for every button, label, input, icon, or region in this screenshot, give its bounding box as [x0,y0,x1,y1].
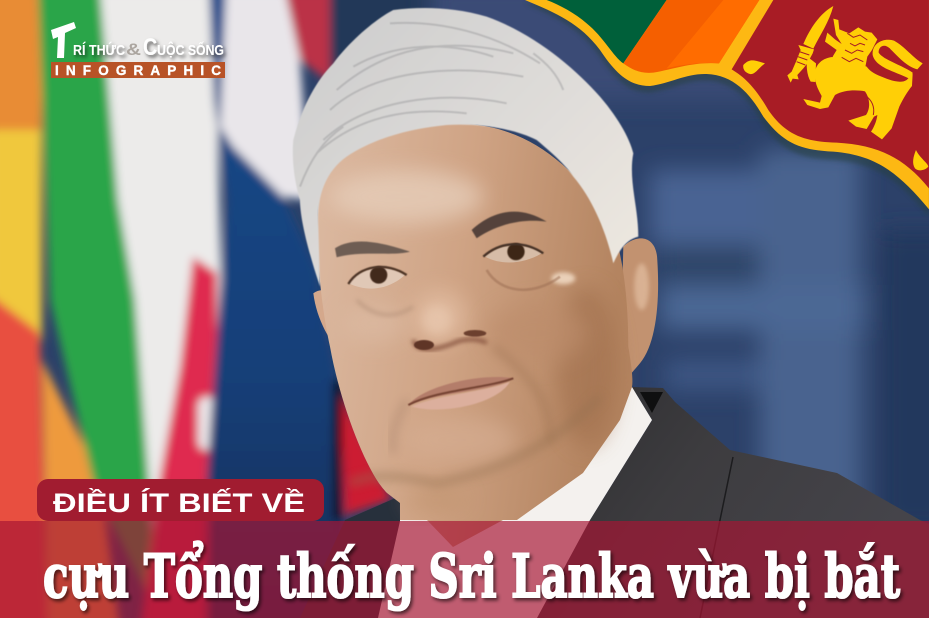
right eyebrow [472,212,547,238]
hair strands [300,23,563,187]
left flags [0,0,440,618]
flag orange band [623,0,759,73]
left ear [313,290,347,360]
publisher logo [51,22,225,78]
flag red field [732,0,929,188]
tag: điều ít biết về: ĐIỀU ÍT BIẾT VỀ [53,487,305,518]
logo text tri thuc: RÍ THỨC [73,41,125,59]
face and neck [317,123,632,547]
mouth [408,377,513,410]
infographic ribbon [51,62,225,78]
logo text cuoc song: CUỘC SỐNG [143,34,224,61]
flag corner petals [743,60,928,170]
logo ampersand: & [126,40,141,59]
Sri Lanka flag [525,0,929,217]
bottom title band [0,521,929,618]
portrait of the former president [293,8,658,547]
right ear [620,238,658,387]
shirt collar [378,387,652,618]
hair [293,8,638,287]
face shading [330,170,617,512]
left eye [348,266,407,289]
tag: điều ít biết về [37,479,324,521]
flag lion with sword [787,6,923,139]
nose [413,306,487,350]
right eye [483,243,543,262]
left eyebrow [335,242,410,257]
flag yellow border [525,0,929,209]
suit jacket [300,387,929,618]
right backdrop [430,0,929,530]
flag green band [547,0,667,63]
flag shadow [525,0,929,217]
logo T mark [51,22,76,58]
infographic label: INFOGRAPHIC [55,63,221,78]
